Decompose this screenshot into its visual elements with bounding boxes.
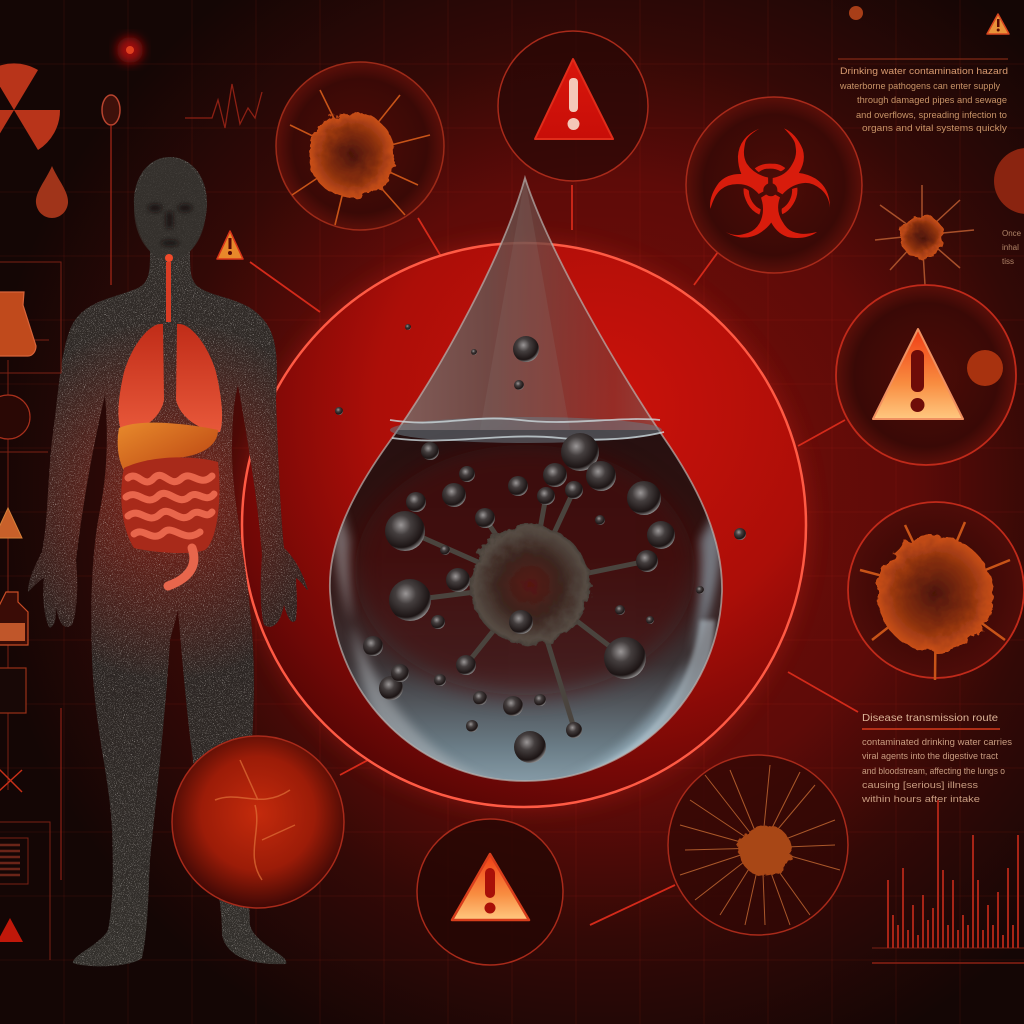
- text block: top right: [838, 59, 1008, 134]
- text block: bottom right: within hours after intake: [861, 794, 980, 805]
- warning circle: top center: [498, 31, 648, 181]
- warning circle: right: [836, 285, 1016, 465]
- text block: top right: organs and vital systems quickly: [862, 123, 1007, 134]
- icon: bottle: [0, 592, 28, 645]
- text fragment: right edge: [1002, 229, 1022, 266]
- partial red sphere right edge: [994, 148, 1024, 214]
- small warning triangle by head: [217, 231, 243, 259]
- text block: bottom right: viral agents into the digestive tract: [862, 751, 998, 762]
- icon: frame lines: [0, 262, 61, 960]
- bar chart: [872, 800, 1024, 963]
- text block: top right: waterborne pathogens can enter supply: [839, 81, 1000, 92]
- text fragment: right edge: inhal: [1002, 243, 1019, 252]
- icon: tool box: [0, 668, 26, 713]
- virus circle: right: [848, 502, 1024, 680]
- small virus right: [875, 185, 974, 285]
- warning circle: bottom: [417, 819, 563, 965]
- trachea: [165, 254, 173, 322]
- head: [134, 158, 206, 260]
- text block: top right: Drinking water contamination hazard: [840, 66, 1008, 77]
- virus spikes: [410, 490, 647, 728]
- vertical accent line: [60, 708, 62, 880]
- text block: bottom right: contaminated drinking water carries: [862, 737, 1012, 748]
- text block: top right: through damaged pipes and sewage: [857, 95, 1007, 106]
- text block: bottom right: Disease transmission route: [862, 712, 998, 724]
- icon: blood drop: [36, 166, 68, 218]
- virus body: [470, 525, 590, 645]
- liver: [118, 423, 218, 474]
- icon: warning: [0, 918, 23, 942]
- icon: radiation symbol: [0, 63, 60, 150]
- text fragment: right edge: tiss: [1002, 257, 1014, 266]
- connector lines: [250, 185, 858, 925]
- intestines: [121, 457, 219, 586]
- human body figure: [28, 157, 308, 966]
- drop of water with virus: [320, 170, 746, 790]
- icon: flask: [0, 292, 36, 356]
- text block: bottom right: and bloodstream, affecting the lungs o: [862, 766, 1005, 777]
- icon: round leaf: [0, 395, 30, 439]
- heartbeat line: [185, 84, 262, 128]
- text block: bottom right: causing [serious] illness: [862, 780, 978, 791]
- virus circle: top left: [276, 62, 444, 230]
- small warning triangle top right: [987, 14, 1009, 34]
- face shading: [148, 204, 192, 246]
- water surface: [390, 417, 664, 443]
- icon: swab: [102, 95, 120, 285]
- icon: small triangle: [0, 508, 22, 538]
- text block: top right: and overflows, spreading infection to: [856, 110, 1007, 121]
- text block: bottom right: [861, 712, 1012, 805]
- small orange dot top right: [849, 6, 863, 20]
- small glowing dot top: [117, 37, 143, 63]
- drop outline: [330, 178, 722, 781]
- bubbles and virus particles: [335, 324, 746, 763]
- biohazard circle: ☣: [703, 100, 837, 274]
- central red circle: [242, 243, 806, 807]
- lungs: [118, 324, 222, 432]
- text fragment: right edge: Once: [1002, 229, 1022, 238]
- red plasma circle: bottom left: [172, 736, 344, 908]
- icon: bars: [0, 845, 20, 875]
- icon: cross: [0, 768, 22, 792]
- starburst circle: [668, 755, 848, 935]
- left column icons: [0, 262, 61, 960]
